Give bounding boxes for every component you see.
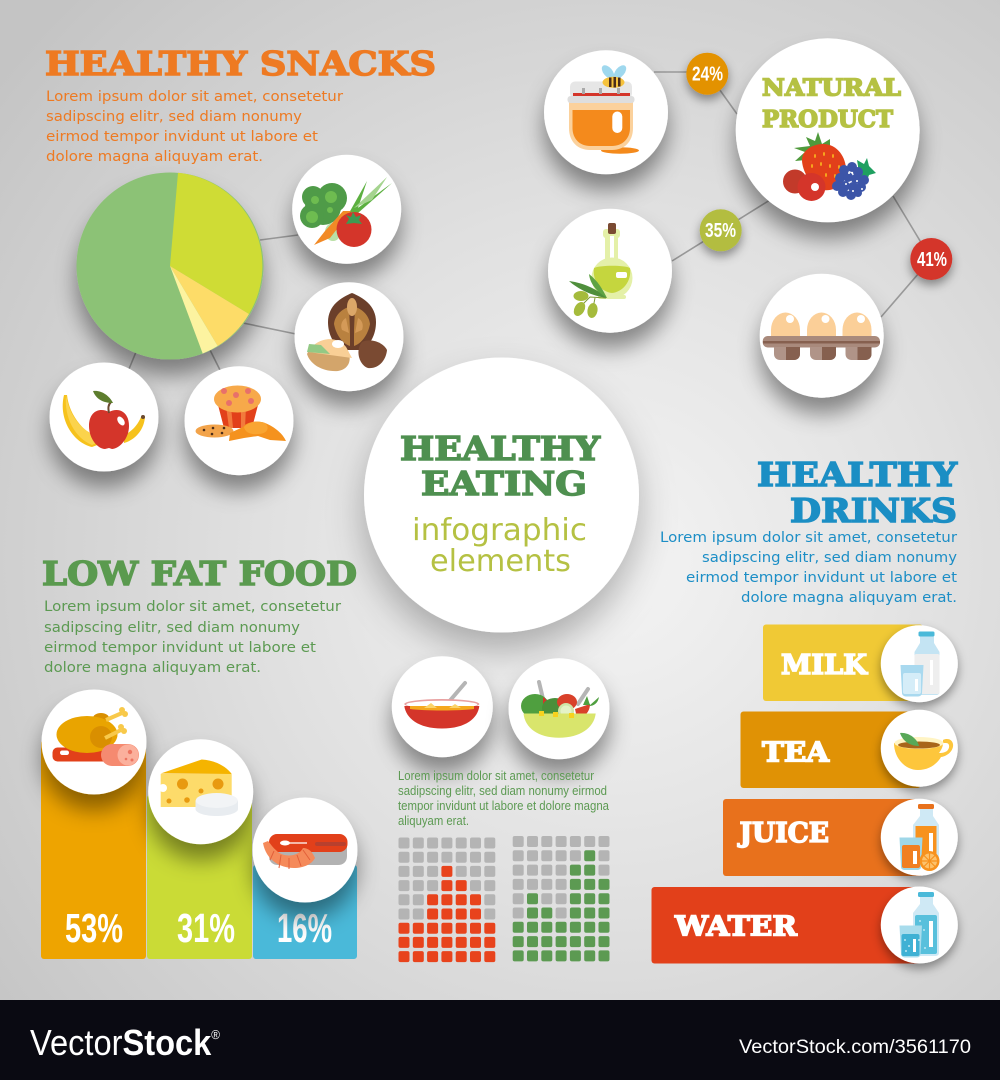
- drink bar: tea: [740, 710, 958, 788]
- title: healthy snacks: HEALTHY SNACKS: [45, 44, 436, 83]
- title: low fat food: LOW FAT FOOD: [42, 554, 357, 593]
- badge: 41%: 41%: [917, 249, 947, 271]
- icon: berries: [783, 132, 876, 201]
- badge: 35%: [700, 209, 742, 251]
- icon: water bottle and glass: [900, 892, 939, 958]
- text block: drinks description: Lorem ipsum dolor sit amet, consetetur: [660, 530, 957, 546]
- waffle chart: red: [398, 838, 495, 962]
- icon: honey jar: [544, 50, 668, 174]
- icon: olive oil bottle: [548, 209, 672, 333]
- pie chart: [76, 172, 264, 360]
- connector lines: [129, 72, 931, 370]
- natural product heading: NATURAL: [762, 74, 901, 102]
- text block: small green description: tempor invidunt ut labore et dolore magna: [398, 798, 610, 813]
- drink bar: juice: [723, 799, 958, 876]
- text block: small green description: aliquyam erat.: [398, 813, 469, 828]
- central heading: HEALTHY: [400, 429, 600, 468]
- text block: snacks description: [46, 89, 343, 165]
- natural product heading: PRODUCT: [762, 106, 893, 133]
- icon: salad bowl: [508, 658, 610, 759]
- bar: 53%: [41, 740, 146, 959]
- title: healthy drinks: HEALTHY: [757, 455, 957, 494]
- badge: 24%: 24%: [692, 64, 723, 86]
- footer band: [0, 1000, 1000, 1080]
- badge: 41%: [910, 238, 952, 280]
- text block: drinks description: sadipscing elitr, sed diam nonumy: [702, 550, 957, 566]
- panel: natural product: [736, 38, 920, 222]
- badge: 24%: [686, 53, 728, 95]
- text block: low fat description: dolore magna aliquyam erat.: [44, 660, 261, 676]
- bar: 16%: 16%: [277, 905, 332, 951]
- text block: snacks description: sadipscing elitr, sed diam nonumy: [46, 109, 302, 125]
- title: healthy drinks: [757, 455, 957, 530]
- drink bar: water: [652, 886, 958, 964]
- text block: low fat description: sadipscing elitr, sed diam nonumy: [44, 620, 300, 636]
- central heading: [400, 429, 600, 503]
- icon: eggs in tray: [760, 274, 884, 398]
- drink bar: tea: TEA: [762, 738, 830, 769]
- icon: soup bowl: [392, 656, 493, 757]
- central heading: EATING: [421, 464, 587, 503]
- icon: nuts: [294, 282, 404, 391]
- central subtitle: elements: [430, 544, 571, 579]
- footer logo: ®: [211, 1027, 220, 1042]
- icon: chicken and sausage: [42, 690, 146, 794]
- drink bar: milk: [763, 624, 958, 702]
- text block: low fat description: [44, 599, 341, 676]
- text block: low fat description: eirmod tempor invidunt ut labore et: [44, 640, 316, 656]
- icon: milk bottle and glass: [900, 632, 940, 696]
- text block: drinks description: eirmod tempor invidunt ut labore et: [686, 570, 957, 586]
- title: healthy drinks: DRINKS: [790, 491, 957, 530]
- icon: tea cup: [894, 733, 953, 770]
- text block: snacks description: eirmod tempor invidunt ut labore et: [46, 129, 318, 145]
- text block: low fat description: Lorem ipsum dolor sit amet, consetetur: [44, 599, 341, 615]
- drink bar: milk: MILK: [781, 650, 869, 681]
- central subtitle: infographic: [412, 513, 587, 548]
- panel: central title circle: [364, 358, 639, 632]
- text block: snacks description: Lorem ipsum dolor sit amet, consetetur: [46, 89, 343, 105]
- drink bar: juice: JUICE: [738, 818, 829, 849]
- icon: canned fish and shrimp: [252, 798, 358, 902]
- bar: 31%: 31%: [177, 905, 235, 951]
- natural product heading: [762, 74, 901, 133]
- icon: juice bottle, glass and orange: [900, 804, 940, 871]
- badge: 35%: 35%: [705, 220, 736, 242]
- text block: small green description: sadipscing elitr, sed diam nonumy eirmod: [398, 783, 607, 798]
- text block: small green description: Lorem ipsum dolor sit amet, consetetur: [398, 768, 595, 783]
- waffle chart: green: [513, 836, 610, 961]
- bar: 16%: [253, 865, 357, 959]
- footer logo: VectorStock: [30, 1022, 221, 1063]
- text block: small green description: [398, 768, 610, 828]
- central subtitle: [412, 513, 587, 579]
- footer url: VectorStock.com/3561170: [739, 1037, 971, 1058]
- text block: drinks description: [660, 530, 957, 606]
- icon: banana and apple: [50, 362, 158, 472]
- drink bar: water: WATER: [674, 912, 798, 942]
- text block: drinks description: dolore magna aliquyam erat.: [741, 590, 957, 606]
- icon: vegetables: [292, 155, 401, 264]
- icon: cheese: [148, 739, 253, 844]
- text block: snacks description: dolore magna aliquyam erat.: [46, 149, 263, 165]
- icon: muffin, cookie, croissant: [184, 366, 294, 475]
- bar: 31%: [147, 795, 252, 959]
- bar: 53%: 53%: [65, 905, 123, 951]
